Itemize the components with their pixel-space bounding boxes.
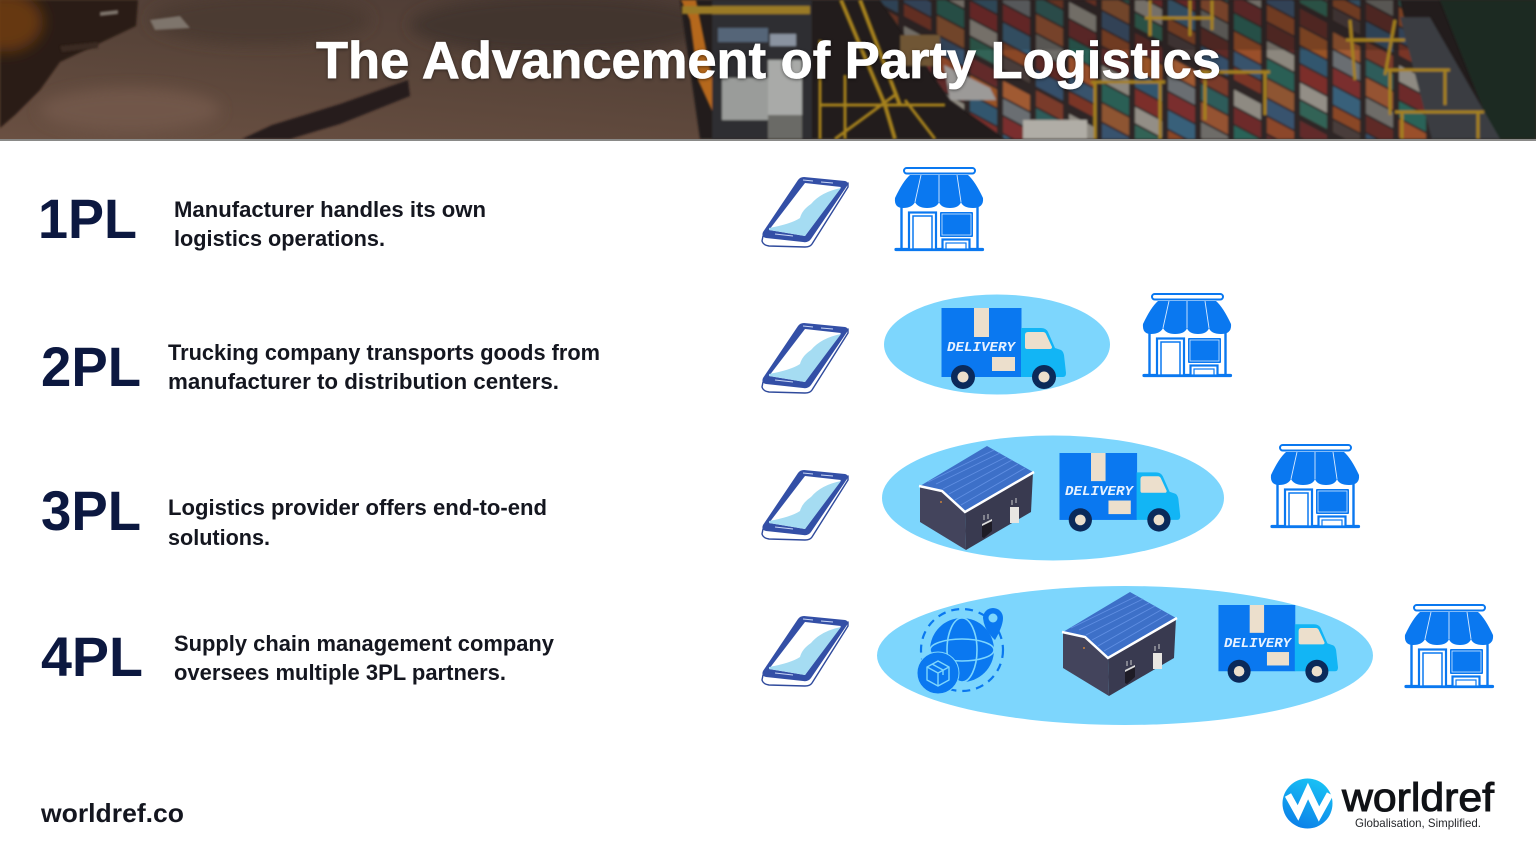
icon: phone xyxy=(762,177,848,247)
icon: warehouse xyxy=(919,446,1034,550)
icon: delivery truck: DELIVERY xyxy=(1224,636,1293,652)
ellipse: provider scope xyxy=(877,586,1373,725)
heading: 3PL: 3PL xyxy=(41,479,141,542)
description: 4PL: Supply chain management company xyxy=(174,631,555,656)
logo tagline: Globalisation, Simplified. xyxy=(1355,816,1481,830)
icon: store xyxy=(1271,445,1359,526)
description: 1PL: logistics operations. xyxy=(174,226,385,251)
ellipse: provider scope xyxy=(882,436,1224,560)
description: 4PL: oversees multiple 3PL partners. xyxy=(174,660,506,685)
description: 1PL: Manufacturer handles its own xyxy=(174,197,486,222)
website url: worldref.co xyxy=(40,798,184,828)
row: 2PL xyxy=(41,294,1231,398)
icon: delivery truck xyxy=(942,308,1066,389)
row: 1PL xyxy=(38,168,983,251)
ellipse: provider scope xyxy=(884,294,1110,394)
description: 3PL xyxy=(168,495,547,550)
heading: 2PL: 2PL xyxy=(41,335,141,398)
worldref logo xyxy=(1282,776,1495,830)
icon: phone xyxy=(762,470,848,540)
icon: delivery truck: DELIVERY xyxy=(947,340,1017,356)
description: 2PL xyxy=(168,340,600,394)
icon: delivery truck xyxy=(1218,605,1338,683)
description: 3PL: solutions. xyxy=(168,525,270,550)
icon: warehouse xyxy=(1062,592,1177,696)
description: 4PL xyxy=(174,631,555,685)
title: The Advancement of Party Logistics xyxy=(316,32,1221,90)
description: 3PL: Logistics provider offers end-to-end xyxy=(168,495,547,520)
icon: phone xyxy=(762,616,848,686)
icon: store xyxy=(895,168,983,250)
icon: store xyxy=(1143,294,1231,376)
icon: delivery truck: DELIVERY xyxy=(1065,484,1135,500)
header banner: port photograph xyxy=(0,0,1536,141)
heading: 1PL: 1PL xyxy=(38,187,137,250)
icon: phone xyxy=(762,323,848,393)
heading: 4PL: 4PL xyxy=(41,625,143,688)
icon: delivery truck xyxy=(1059,453,1180,532)
logo wordmark: worldref xyxy=(1341,776,1495,820)
description: 2PL: manufacturer to distribution centers. xyxy=(168,369,559,394)
row: 3PL xyxy=(41,436,1359,560)
logo mark xyxy=(1282,778,1332,828)
icon: store xyxy=(1405,605,1493,686)
description: 2PL: Trucking company transports goods from xyxy=(168,340,600,365)
description: 1PL xyxy=(174,197,486,251)
icon: globe with pin and parcel xyxy=(917,608,1003,694)
row: 4PL xyxy=(41,586,1493,725)
